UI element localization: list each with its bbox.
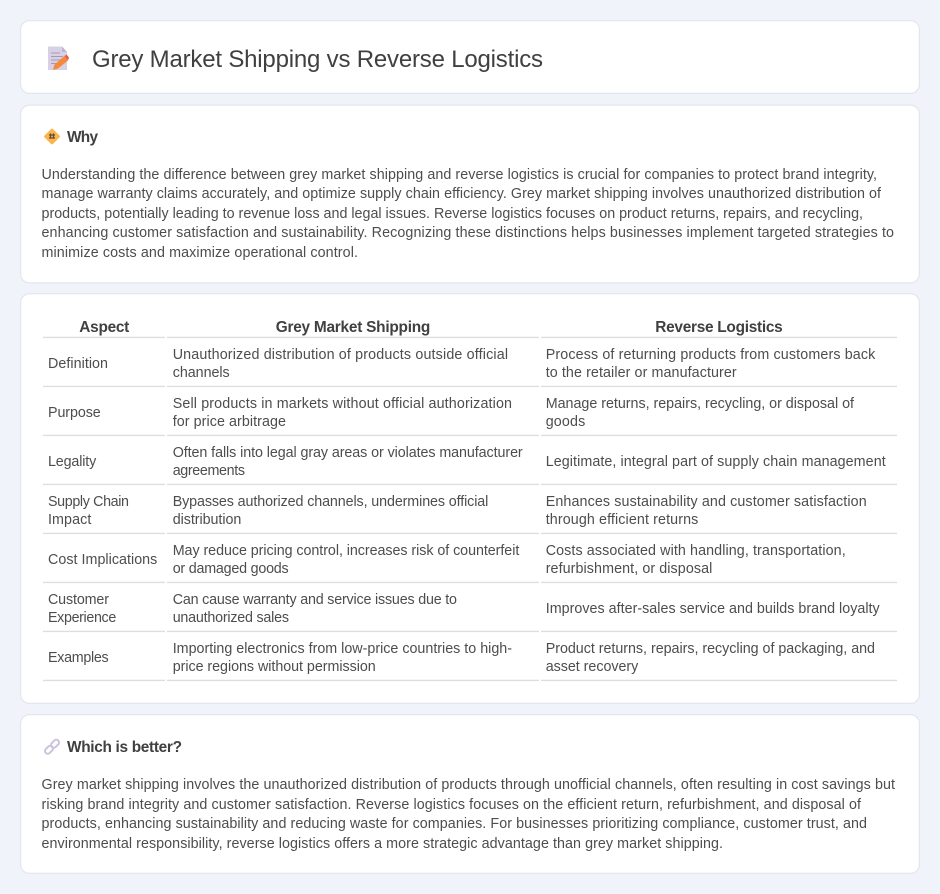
heading: which is better: Which is better? (67, 739, 182, 756)
panel: why (21, 105, 919, 283)
row: legality: Legality (48, 454, 97, 470)
panel: which is better (21, 715, 919, 873)
row: definition: channels (173, 365, 230, 381)
title: Grey Market Shipping vs Reverse Logistics (92, 46, 543, 73)
row: examples: Importing electronics from low-price countries to high- (173, 641, 512, 657)
icon: warning diamond (44, 128, 60, 145)
row: customer experience: Customer (48, 592, 109, 608)
row: cost implications: May reduce pricing control, increases risk of counterfeit (173, 543, 519, 559)
row: definition: Definition (48, 356, 108, 372)
row: legality: Legitimate, integral part of supply chain management (546, 454, 886, 470)
row: cost implications (48, 543, 846, 577)
text block: why paragraph: Understanding the difference between grey market shipping and reverse logistics is crucial for companies to protect brand integrity, (42, 167, 877, 183)
row: supply chain impact: Enhances sustainability and customer satisfaction (546, 494, 867, 510)
text block: why paragraph: manage warranty claims accurately, and optimize supply chain efficiency. Grey market shipping involves unauthorized distribution of (42, 186, 881, 202)
row: examples (48, 641, 875, 675)
text block: which is better paragraph: environmental responsibility, reverse logistics offers a more strategic advantage than grey market shipping. (42, 836, 723, 852)
row: definition: Process of returning products from customers back (546, 347, 876, 363)
text block: why paragraph: minimize costs and maximize operational control. (42, 245, 358, 261)
row: definition: Unauthorized distribution of products outside official (173, 347, 508, 363)
row: purpose: goods (546, 414, 585, 430)
row: purpose: Purpose (48, 405, 101, 421)
text block: why paragraph: enhancing customer satisfaction and sustainability. Recognizing these distinctions helps businesses implement targeted strategies to (42, 225, 894, 241)
row: cost implications: refurbishment, or disposal (546, 561, 712, 577)
heading: why: Why (67, 129, 98, 146)
row: cost implications: or damaged goods (173, 561, 289, 577)
row: legality: Often falls into legal gray areas or violates manufacturer (173, 445, 523, 461)
row: customer experience: unauthorized sales (173, 610, 289, 626)
row: supply chain impact: distribution (173, 512, 241, 528)
row: supply chain impact (48, 494, 867, 528)
row: definition (48, 347, 876, 381)
row: customer experience (48, 592, 881, 626)
row: legality: agreements (173, 463, 245, 479)
panel: comparison table (21, 294, 919, 703)
icon: chain link (44, 739, 60, 755)
text block: why paragraph: products, potentially leading to revenue loss and legal issues. Reverse logistics focuses on product returns, repairs, and recycling, (42, 206, 863, 222)
row: purpose (48, 396, 854, 430)
row: examples: Examples (48, 650, 109, 666)
row: cost implications: Cost Implications (48, 552, 157, 568)
row: examples: price regions without permission (173, 659, 376, 675)
row: examples: Product returns, repairs, recycling of packaging, and (546, 641, 875, 657)
panel: title header (21, 21, 919, 93)
text block: why paragraph (42, 167, 894, 261)
text block: which is better paragraph: Grey market shipping involves the unauthorized distribution of products through unofficial channels, often resulting in cost savings but (42, 777, 895, 793)
row: purpose: Manage returns, repairs, recycling, or disposal of (546, 396, 854, 412)
text block: which is better paragraph: products, enhancing sustainability and reducing waste for companies. For businesses prioritizing compliance, customer trust, and (42, 816, 867, 832)
row: customer experience: Improves after-sales service and builds brand loyalty (546, 601, 881, 617)
row: supply chain impact: Supply Chain (48, 494, 129, 510)
row: customer experience: Experience (48, 610, 116, 626)
table header row: Grey Market Shipping (276, 319, 430, 336)
text block: which is better paragraph: risking brand integrity and customer satisfaction. Reverse logistics focuses on the efficient return, refurbishment, and disposal of (42, 797, 861, 813)
table header row (79, 319, 783, 336)
row: definition: to the retailer or manufacturer (546, 365, 737, 381)
row: supply chain impact: Impact (48, 512, 91, 528)
table header row: Reverse Logistics (655, 319, 783, 336)
row: customer experience: Can cause warranty and service issues due to (173, 592, 457, 608)
icon: document with pencil (48, 46, 69, 70)
row: purpose: Sell products in markets without official authorization (173, 396, 512, 412)
row: cost implications: Costs associated with handling, transportation, (546, 543, 846, 559)
row: purpose: for price arbitrage (173, 414, 286, 430)
row: supply chain impact: Bypasses authorized channels, undermines official (173, 494, 488, 510)
row: supply chain impact: through efficient returns (546, 512, 698, 528)
table header row: Aspect (79, 319, 129, 336)
text block: which is better paragraph (42, 777, 895, 852)
row: legality (48, 445, 886, 479)
row: examples: asset recovery (546, 659, 639, 675)
